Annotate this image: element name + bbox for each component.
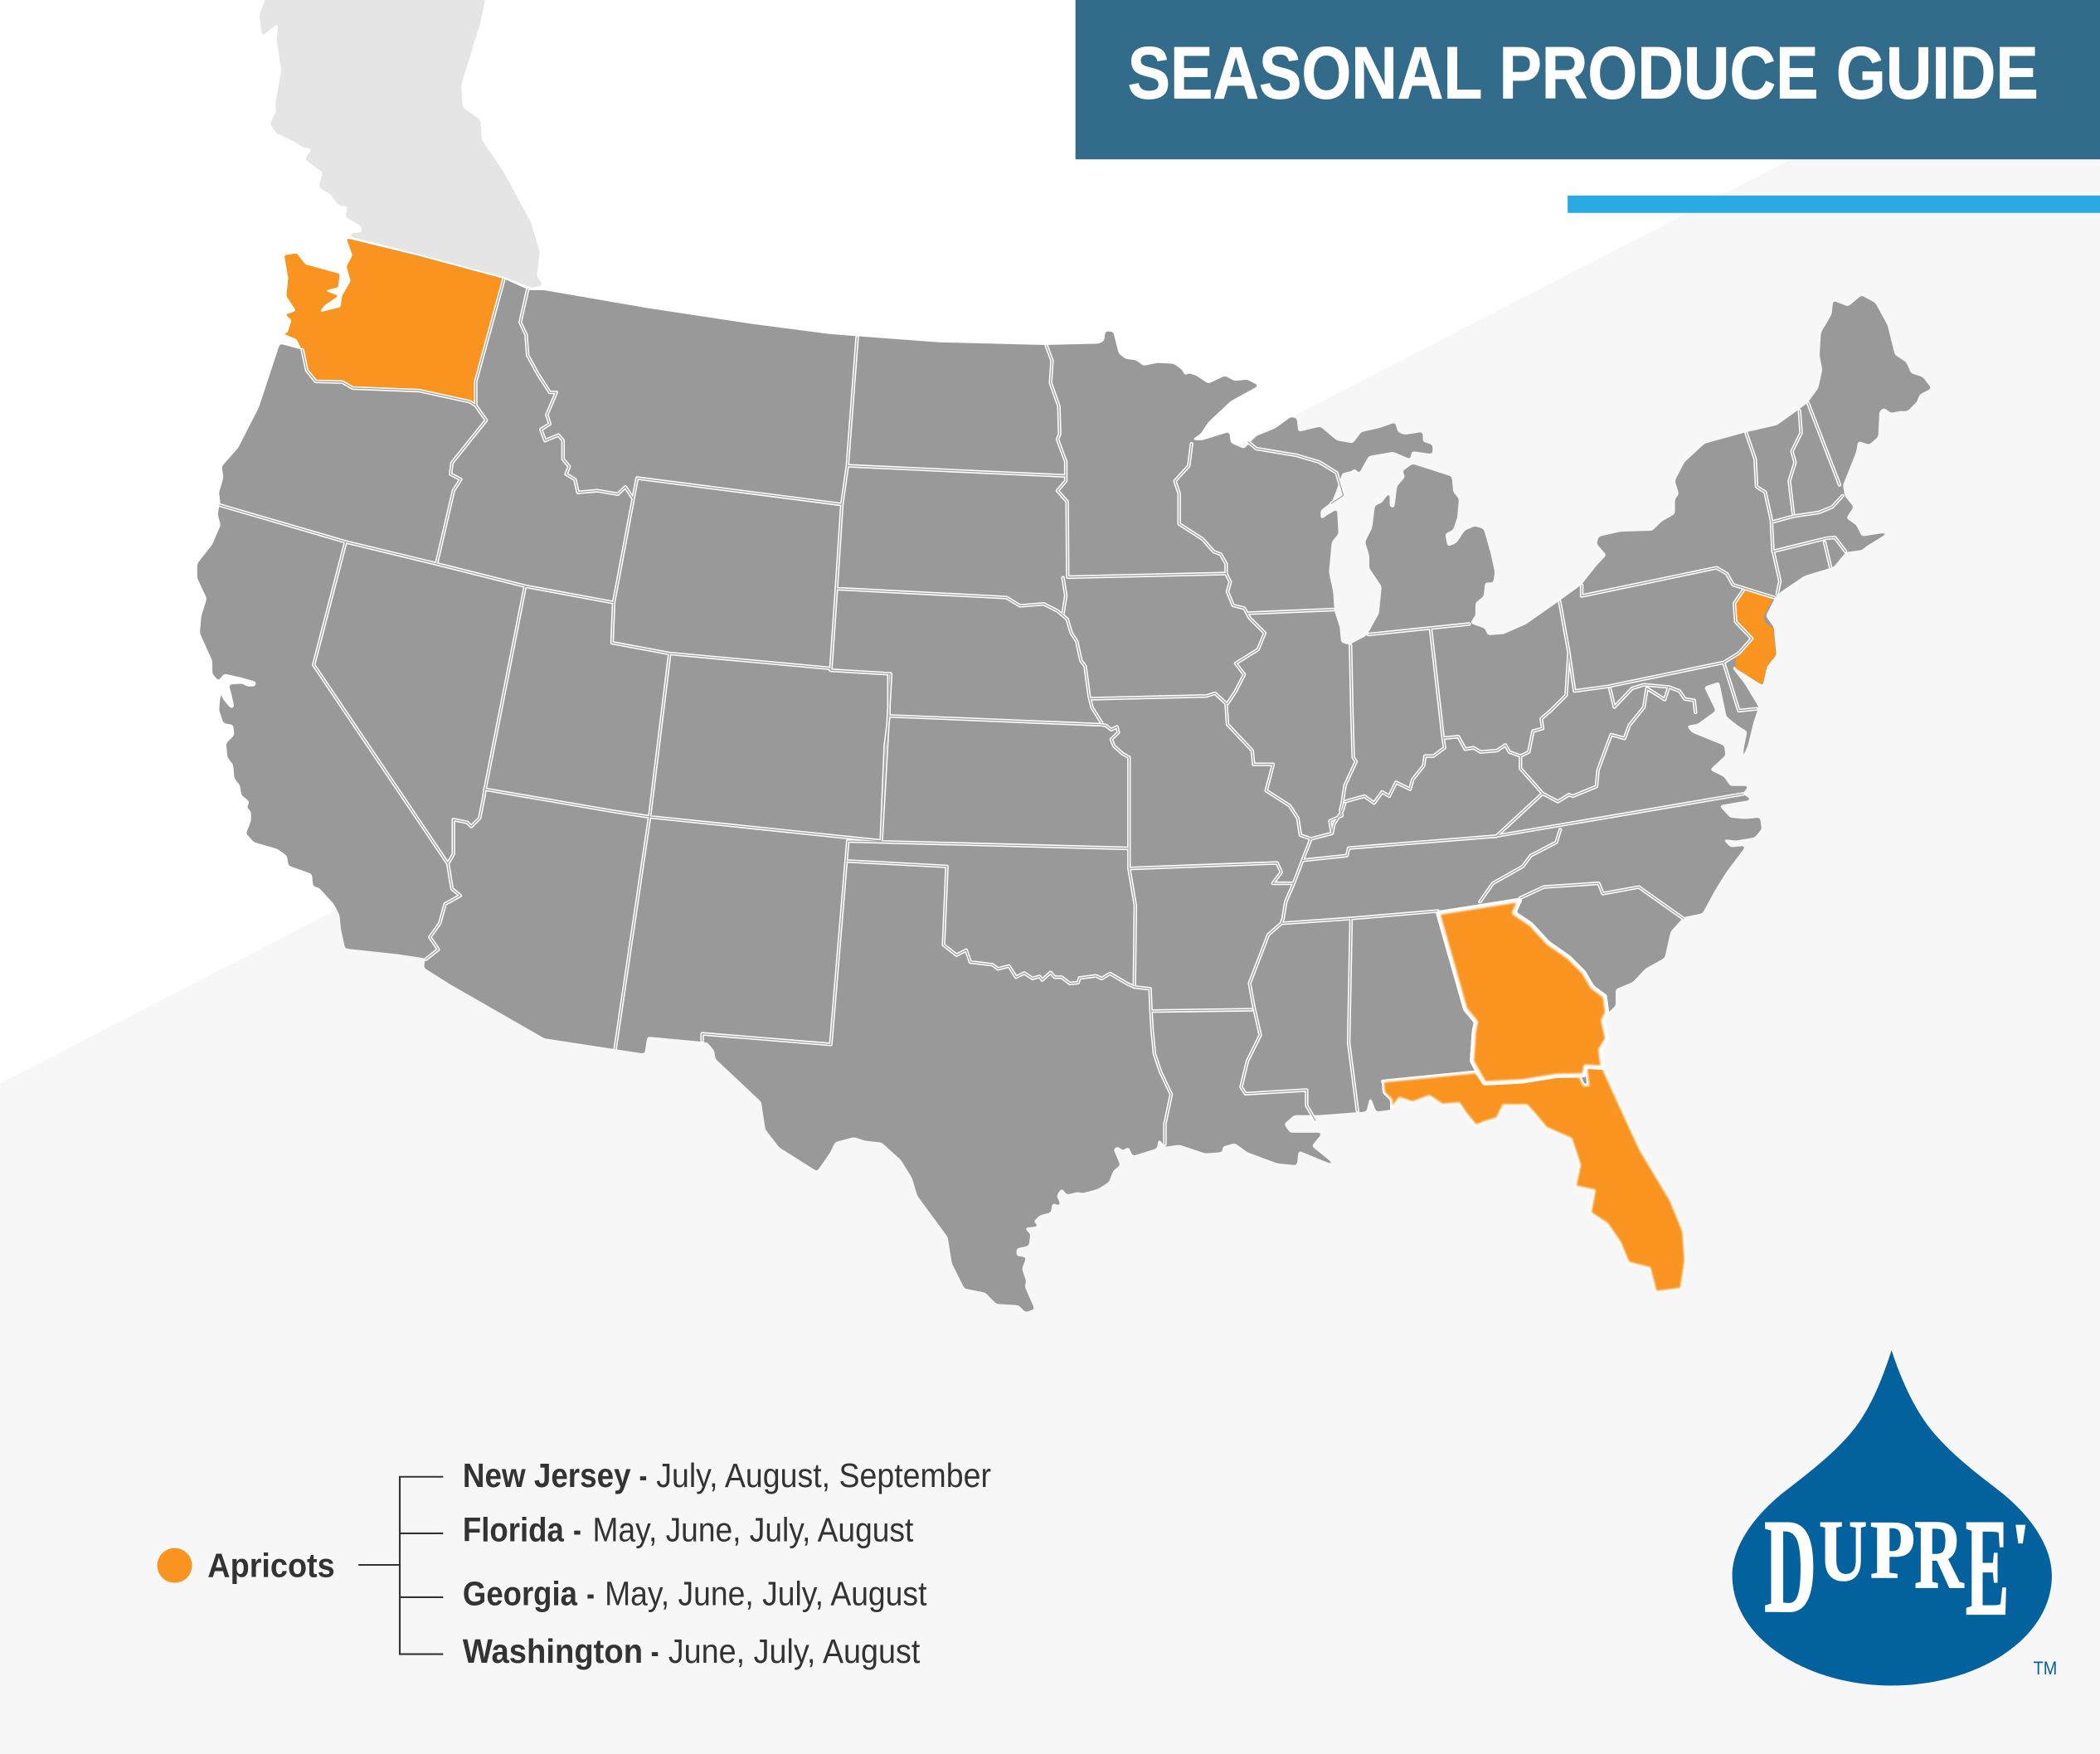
map: Georgia highlighted — [1438, 900, 1607, 1083]
accent bar — [1568, 196, 2100, 213]
title banner — [1076, 0, 2100, 159]
legend row: New Jersey — [463, 1456, 991, 1494]
legend row: Florida: May, June, July, August — [593, 1511, 913, 1549]
legend row: Washington — [463, 1632, 920, 1670]
logo: wordmark — [1764, 1492, 2030, 1645]
legend row: Georgia: - — [586, 1574, 595, 1612]
legend row: New Jersey: New Jersey — [463, 1456, 631, 1494]
logo: wordmark: D — [1764, 1492, 1816, 1641]
map: state border lines — [220, 279, 1845, 1144]
legend row: Washington: - — [651, 1632, 659, 1670]
legend: connector bracket — [358, 1477, 443, 1654]
legend row: Florida — [463, 1511, 913, 1549]
legend row: Washington: Washington — [463, 1632, 643, 1670]
map: contiguous United States silhouette — [197, 239, 1931, 1312]
logo: wordmark: R — [1914, 1500, 1964, 1610]
map: Canada landmass — [260, 0, 542, 287]
logo: Dupre water drop — [1733, 1350, 2057, 1685]
legend row: Florida: Florida — [463, 1511, 564, 1549]
logo: trademark: TM — [2034, 1658, 2057, 1679]
legend row: New Jersey: July, August, September — [656, 1456, 991, 1494]
map: Florida highlighted — [1383, 1066, 1685, 1292]
legend row: New Jersey: - — [639, 1456, 647, 1494]
logo: wordmark: ' — [2011, 1509, 2030, 1591]
legend row: Washington: June, July, August — [668, 1632, 920, 1670]
legend row: Florida: - — [573, 1511, 581, 1549]
logo: wordmark: E — [1966, 1492, 2009, 1645]
logo: wordmark: U — [1819, 1504, 1867, 1600]
legend: orange dot — [158, 1548, 192, 1583]
legend row: Georgia: May, June, July, August — [605, 1574, 926, 1612]
map: Washington highlighted — [283, 239, 503, 406]
legend: produce name: Apricots — [207, 1547, 335, 1585]
legend — [158, 1456, 991, 1670]
logo: wordmark: P — [1870, 1504, 1915, 1596]
map: New Jersey highlighted — [1734, 590, 1776, 685]
legend row: Georgia — [463, 1574, 926, 1612]
legend row: Georgia: Georgia — [463, 1574, 577, 1612]
